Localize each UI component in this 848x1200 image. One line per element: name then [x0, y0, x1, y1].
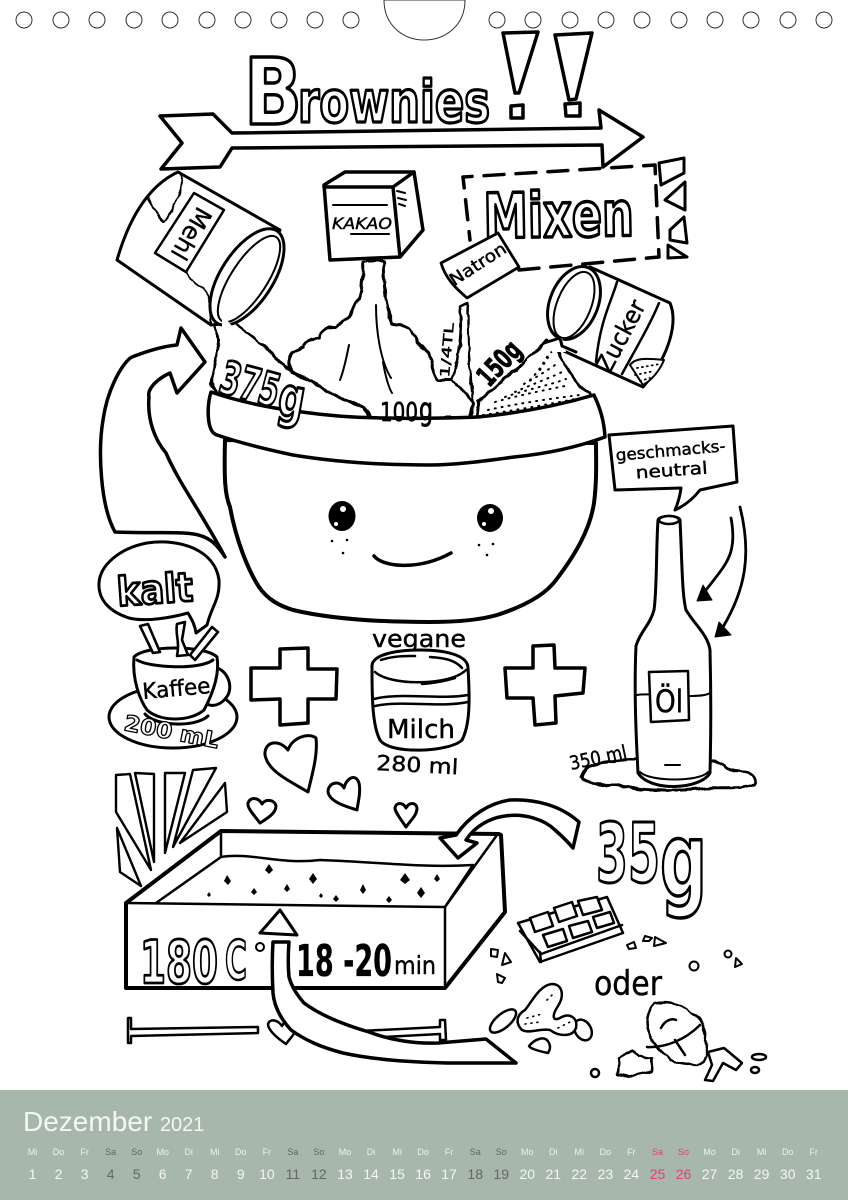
label: Mehl: Mehl [165, 202, 217, 265]
date row: 27 [702, 1166, 717, 1182]
big curved arrow [101, 328, 225, 557]
date row: 12 [311, 1166, 327, 1182]
date row: 9 [237, 1166, 245, 1182]
weekday row [28, 1147, 818, 1157]
weekday row: Fr [263, 1147, 271, 1157]
speech box: geschmacksneutral [609, 426, 737, 510]
broken cookie pieces [591, 1002, 766, 1081]
weekday row: Do [417, 1147, 429, 1157]
label: Mehl [155, 193, 224, 272]
temperature: 180 C°: C [225, 929, 247, 992]
date row: 4 [107, 1166, 115, 1182]
month heading: Dezember 2021 [23, 1106, 204, 1137]
weekday row: Di [367, 1147, 375, 1157]
amount: 100g: g [419, 391, 433, 428]
title: Brownies: rownies [298, 68, 490, 136]
date row: 15 [389, 1166, 405, 1182]
crumbs [491, 936, 742, 983]
date row: 25 [650, 1166, 665, 1182]
weekday row: Mi [575, 1147, 584, 1157]
peanuts [486, 984, 595, 1053]
steam [140, 622, 218, 660]
amount: 150g: 150g [470, 334, 528, 393]
weekday row: Sa [287, 1147, 298, 1157]
baking tray [126, 831, 505, 998]
amount: 375g: 375 [214, 350, 286, 418]
exclamation marks [503, 32, 592, 118]
date row: 30 [780, 1166, 796, 1182]
calendar band [0, 1090, 848, 1200]
oven rack [128, 1018, 446, 1043]
speech box: geschmacksneutral: neutral [635, 459, 708, 483]
oil bottle [635, 516, 711, 787]
kakao box [324, 172, 423, 260]
label: Milch: Milch [387, 715, 455, 745]
date row: 28 [728, 1166, 744, 1182]
coffee cup [109, 622, 237, 754]
date row: 2 [55, 1166, 63, 1182]
burst lines [116, 768, 227, 886]
weekday row: Do [235, 1147, 247, 1157]
weekday row: So [678, 1147, 689, 1157]
speech box: geschmacksneutral: geschmacks- [615, 436, 726, 465]
weekday row: So [131, 1147, 142, 1157]
date row: 24 [624, 1166, 639, 1182]
amount: 35g: g [660, 801, 707, 921]
vegane milch glass [372, 625, 469, 779]
weekday row: Fr [809, 1147, 818, 1157]
flour mound [211, 310, 372, 425]
kalt speech bubble: kalt [115, 565, 195, 616]
amount: 280 ml: 280 ml [376, 751, 459, 779]
time: 18-20 min: min [394, 951, 436, 980]
weekday row: Fr [627, 1147, 636, 1157]
weekday row: Fr [445, 1147, 453, 1157]
oil puddle [581, 760, 756, 790]
date row: 8 [211, 1166, 219, 1182]
mixing bowl [208, 334, 605, 622]
amount: 350 ml: 350 ml [567, 741, 629, 775]
weekday row: So [496, 1147, 507, 1157]
label: Öl [649, 671, 689, 722]
weekday row: Mi [210, 1147, 220, 1157]
label: Zucker: Zucker [590, 295, 652, 377]
weekday row: Di [184, 1147, 193, 1157]
temperature: 180 C°: 180 [140, 928, 218, 998]
title arrow [160, 110, 643, 169]
triangle arrow head [260, 910, 297, 935]
date row: 19 [493, 1166, 509, 1182]
hearts [248, 736, 417, 1044]
weekday row: Sa [470, 1147, 481, 1157]
weekday row: Sa [105, 1147, 116, 1157]
weekday row: Mo [156, 1147, 169, 1157]
face [328, 501, 503, 565]
date row: 13 [337, 1166, 353, 1182]
date row: 17 [441, 1166, 457, 1182]
label: 1/4 TL: 1/4TL [438, 321, 458, 378]
date row: 7 [185, 1166, 193, 1182]
title: Brownies [244, 39, 490, 146]
date row: 5 [133, 1166, 141, 1182]
time: 18-20 min: 18 -20 [296, 936, 392, 987]
date row: 6 [159, 1166, 167, 1182]
amount: 375g: g [274, 364, 310, 432]
weekday row: Sa [652, 1147, 663, 1157]
date row: 16 [415, 1166, 431, 1182]
label: oder: oder [594, 964, 662, 1004]
weekday row: Mi [28, 1147, 37, 1157]
weekday row: So [313, 1147, 324, 1157]
weekday row: Di [731, 1147, 740, 1157]
flour pour [222, 314, 232, 345]
weekday row: Mo [521, 1147, 534, 1157]
label: Öl: Öl [655, 683, 683, 720]
kalt speech bubble [99, 542, 219, 633]
date row: 23 [598, 1166, 613, 1182]
weekday row: Mo [339, 1147, 351, 1157]
weekday row: Fr [80, 1147, 89, 1157]
label: Natron: Natron [446, 239, 511, 291]
weekday row: Do [53, 1147, 64, 1157]
weekday row: Mi [757, 1147, 766, 1157]
amount: 100g: 100 [380, 398, 418, 428]
date row: 26 [676, 1166, 691, 1182]
decorative shapes [659, 158, 687, 258]
flour bag [117, 172, 299, 337]
arrow: into tray [440, 800, 579, 858]
date row [29, 1166, 822, 1182]
chocolate chips [207, 864, 440, 903]
cocoa pile and stream [288, 262, 473, 418]
date row: 22 [572, 1166, 587, 1182]
illustration line art [99, 32, 766, 1081]
date row: 11 [286, 1166, 300, 1182]
arrows toward bottle [697, 507, 746, 637]
title: Brownies: B [244, 39, 302, 146]
date row: 3 [81, 1166, 89, 1182]
natron stream [438, 303, 473, 402]
label: KAKAO: KAKAO [332, 214, 392, 233]
date row: 18 [467, 1166, 483, 1182]
arrow: heat from below [272, 942, 516, 1063]
weekday row: Mo [703, 1147, 716, 1157]
date row: 29 [754, 1166, 770, 1182]
date row: 21 [546, 1166, 561, 1182]
weekday row: Do [600, 1147, 611, 1157]
sugar bag [538, 259, 673, 387]
natron packet [441, 233, 519, 298]
weekday row: Di [549, 1147, 558, 1157]
weekday row: Do [782, 1147, 793, 1157]
amount: 35g: 35 [596, 807, 660, 902]
label: vegane: vegane [372, 625, 466, 653]
label: Kaffee: Kaffee [141, 674, 211, 705]
plus sign right [505, 645, 585, 725]
plus sign left [251, 648, 337, 725]
binding holes [16, 0, 832, 40]
date row: 20 [520, 1166, 535, 1182]
sugar pile [476, 340, 592, 418]
date row: 31 [806, 1166, 822, 1182]
weekday row: Mi [392, 1147, 402, 1157]
mixen dashed box [463, 158, 687, 270]
date row: 14 [363, 1166, 379, 1182]
chocolate bar [518, 897, 623, 962]
date row: 10 [259, 1166, 275, 1182]
amount: 200 mL: 200 mL [122, 711, 221, 754]
date row: 1 [29, 1166, 37, 1182]
heading: Mixen: Mixen [483, 177, 634, 253]
